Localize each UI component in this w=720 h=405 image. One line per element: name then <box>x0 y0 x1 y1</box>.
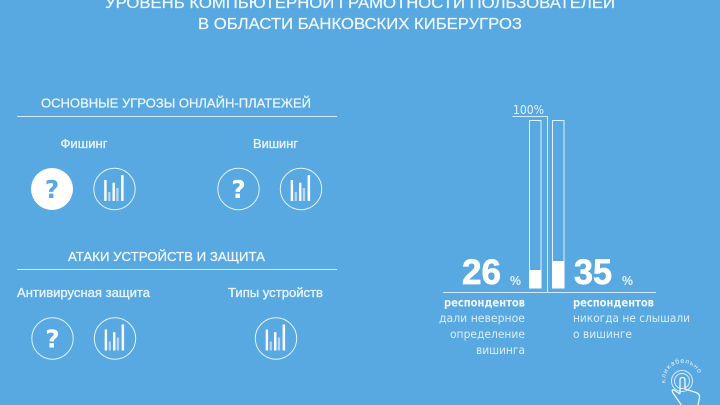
icon: antivirus question <box>32 318 73 359</box>
text: right description: никогда не слышали <box>573 311 690 325</box>
icon: antivirus chart <box>94 318 136 359</box>
text: right description: о вишинге <box>573 327 632 341</box>
label: 100 percent: 100% <box>513 103 544 117</box>
text: left description: вишинга <box>476 343 525 357</box>
icon: clickable hand <box>662 358 701 405</box>
bar: 35 percent <box>552 120 564 288</box>
stat: 26 percent <box>462 253 521 292</box>
icon: active question <box>31 168 73 210</box>
label: antivirus: Антивирусная защита <box>17 286 150 300</box>
text: right description: респондентов <box>573 296 654 310</box>
title <box>105 0 615 33</box>
bar: 26 percent <box>529 120 542 288</box>
icon: clickable hand: кликабельно <box>662 358 701 383</box>
stat: 35 percent: 35 <box>574 253 612 292</box>
text: left description <box>439 296 525 357</box>
icon: phishing chart <box>94 168 135 210</box>
icon: vishing question: ? <box>231 175 246 204</box>
heading: device attacks: АТАКИ УСТРОЙСТВ И ЗАЩИТА <box>68 249 266 264</box>
panel: device attacks and protection <box>17 249 337 359</box>
stat: 26 percent: 26 <box>462 253 501 292</box>
label: phishing: Фишинг <box>60 137 108 151</box>
chart: vishing survey bars <box>443 103 656 292</box>
text: left description: респондентов <box>444 296 525 310</box>
icon: vishing question <box>218 168 259 210</box>
heading: main threats: ОСНОВНЫЕ УГРОЗЫ ОНЛАЙН-ПЛАТЕЖЕЙ <box>41 96 311 110</box>
stat: 35 percent <box>574 253 633 292</box>
stat: 35 percent: % <box>622 274 633 288</box>
icon: vishing chart <box>280 168 322 210</box>
panel: main threats <box>17 96 337 210</box>
icon: active question: ? <box>45 175 59 204</box>
text: right description <box>573 296 690 341</box>
icon: antivirus question: ? <box>45 324 60 354</box>
label: vishing: Вишинг <box>253 137 298 151</box>
text: left description: дали неверное <box>439 311 525 325</box>
label: device types: Типы устройств <box>228 286 323 300</box>
text: left description: определение <box>450 327 525 341</box>
stat: 26 percent: % <box>510 274 521 288</box>
icon: device types chart <box>255 318 297 359</box>
title: В ОБЛАСТИ БАНКОВСКИХ КИБЕРУГРОЗ <box>198 16 522 33</box>
